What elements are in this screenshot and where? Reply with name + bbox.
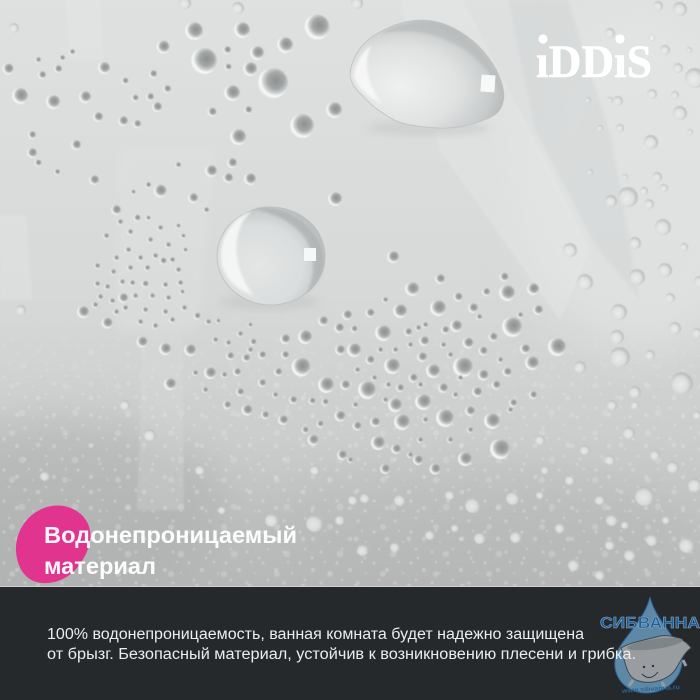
watermark: СИБВАННА drop with bathtub: www.sibvanna.ru (621, 684, 680, 695)
water droplets: dark upper-left group (2, 14, 342, 239)
heading: Водонепроницаемый (44, 522, 297, 548)
watermark: СИБВАННА drop with bathtub (600, 597, 700, 695)
water droplets: small bead cluster left of centre (92, 216, 256, 346)
heading: материал (44, 553, 156, 579)
caption text (47, 626, 636, 663)
logo: iDDIS: ® (650, 35, 655, 42)
logo: iDDIS: ıDDıS (536, 36, 652, 88)
water droplets: dark central-right group (347, 251, 566, 474)
badge: pink blob (16, 506, 90, 583)
caption text: 100% водонепроницаемость, ванная комната будет надежно защищена (47, 626, 584, 643)
water drop: large upper drop (350, 20, 504, 136)
water droplets: dark lower-left group (77, 293, 352, 460)
heading (44, 522, 297, 579)
panel: dark caption strip (0, 586, 700, 700)
caption text: от брызг. Безопасный материал, устойчив к возникновению плесени и грибка. (47, 646, 636, 663)
watermark: СИБВАННА drop with bathtub: СИБВАННА (600, 615, 700, 632)
water drop: round central drop (217, 207, 325, 310)
